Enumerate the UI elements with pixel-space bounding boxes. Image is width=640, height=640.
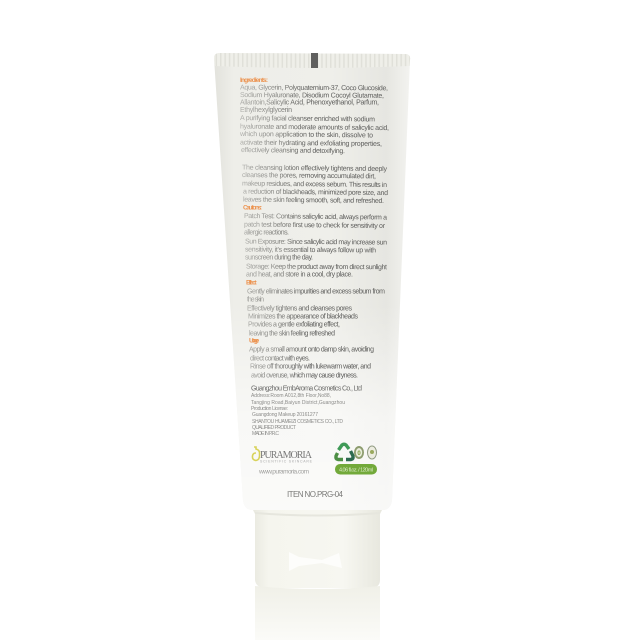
registration mark [311,53,318,68]
cap reflection [255,586,380,640]
manufacturer details [251,386,362,437]
label: effect section: Minimizes the appearance of blackheads [248,314,358,320]
icon: zero badge: 0 [357,451,361,457]
manufacturer details: SHANTOU HUAMEIZI COSMETICS CO., LTD [252,419,343,425]
label: cautions section: patch test before first use to check for sensitivity or [244,222,386,230]
label: ingredients section: makeup residues, and excess sebum. This results in [242,181,387,189]
label: ingredients section [239,77,389,205]
manufacturer details: Address:Room A012,8th Floor,No88, [251,393,331,399]
manufacturer details: QUALIFIED PRODUCT [252,425,296,431]
item number: ITEN NO.PRG-04 [287,490,344,499]
label: cautions section: Storage: Keep the product away from direct sunlight [246,264,387,271]
label: effect section [246,280,385,338]
label: cautions section: Sun Exposure: Since salicylic acid may increase sun [245,239,387,246]
label: ingredients section: Sodium Hyaluronate, Disodium Cocoyl Glutamate, [240,92,384,100]
brand logo: SCIENTIFIC SKINCARE [260,460,313,464]
heading: ingredients: Ingredients: [240,77,268,84]
label: ingredients section: hyaluronate and moderate amounts of salicylic acid, [240,124,389,132]
label: cautions section [243,204,387,278]
icon: brand mark [252,447,260,460]
label: usage section [249,338,374,380]
label: usage section: direct contact with eyes. [250,356,310,362]
manufacturer details: Tangjing Road,Baiyun District,Guangzhou [251,400,345,406]
heading: usage: Usage: [249,338,260,344]
tube body [214,53,410,510]
crimped seal band [214,53,410,68]
label: ingredients section: a reduction of blackheads, minimized pore size, and [243,189,388,197]
label: ingredients section: which upon application to the skin, dissolve to [239,131,373,139]
label: usage section: avoid overuse, which may cause dryness. [251,372,358,380]
label: ingredients section: cleanses the pores, removing accumulated dirt, [242,172,376,180]
volume badge: 4.06 fl.oz. / 120ml [339,468,373,474]
label: cautions section: Patch Test: Contains salicylic acid, always perform a [244,213,387,221]
label: ingredients section: effectively cleansing and detoxifying. [241,147,345,155]
manufacturer details: Production License: [251,406,288,412]
manufacturer details: MADE IN P.R.C [252,431,279,437]
label: effect section: Gently eliminates impurities and excess sebum from [247,288,385,296]
screw cap [253,510,382,588]
brand logo: PURAMORIA [260,450,313,461]
manufacturer details: Guangdong Makeup 20161277 [252,412,318,418]
label: ingredients section: The cleansing lotion effectively tightens and deeply [242,165,388,173]
label: usage section: Rinse off thoroughly with lukewarm water, and [250,364,371,370]
icon: zero badge [354,446,364,459]
label: usage section: Apply a small amount onto damp skin, avoiding [249,346,374,354]
label: ingredients section: A purifying facial cleanser enriched with sodium [240,115,375,123]
website: www.puramoria.com [258,468,309,476]
label: effect section: leaving the skin feeling refreshed [249,330,335,338]
label: effect section: Provides a gentle exfoliating effect, [248,322,340,328]
label: cautions section: sensitivity, it's essential to always follow up with [245,247,376,254]
manufacturer details: Guangzhou EmbAroma Cosmetics Co., Ltd [251,386,362,392]
label: ingredients section: Allantoin,Salicylic Acid, Phenoxyethanol, Parfum, [240,100,379,106]
label: ingredients section: Aqua, Glycerin, Polyquaternium-37, Coco Glucoside, [240,85,388,92]
brand logo [252,447,313,464]
icon: recycling symbol [336,444,353,460]
label: cautions section: sunscreen during the day. [245,254,313,262]
label: effect section: the skin [247,296,264,304]
label: cautions section: allergic reactions. [244,230,289,236]
heading: cautions: Cautions: [243,204,262,212]
label: effect section: Effectively tightens and cleanses pores [247,306,352,312]
label: ingredients section: Ethylhexylglycerin [240,107,292,114]
label: cautions section: and heat, and store in a cool, dry place. [246,272,353,278]
heading: effect: Effect: [246,280,257,286]
label: ingredients section: activate their hydrating and exfoliating properties, [240,140,382,148]
icon: certification badge [368,446,376,459]
volume badge [335,464,377,474]
label: ingredients section: leaves the skin feeling smooth, soft, and refreshed. [243,197,384,205]
